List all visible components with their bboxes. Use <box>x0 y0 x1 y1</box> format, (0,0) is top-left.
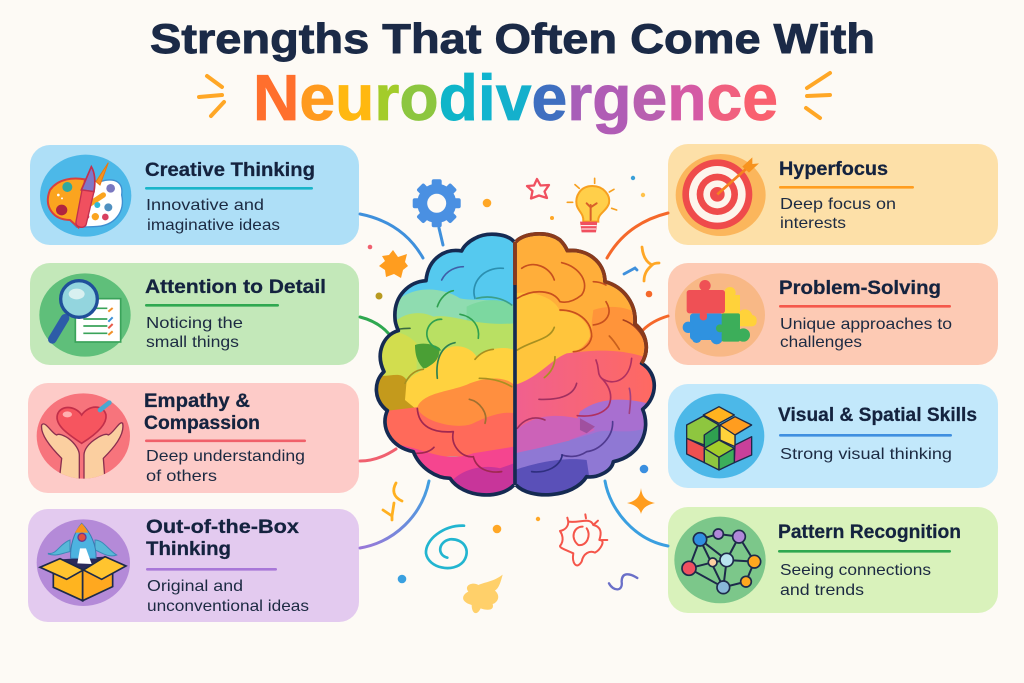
icon: hands holding heart <box>37 393 130 480</box>
underline <box>779 434 952 437</box>
description <box>146 448 305 485</box>
icon: red outline star <box>527 179 549 198</box>
heading: Problem-Solving <box>779 277 941 299</box>
panel: Hyperfocus <box>668 144 998 245</box>
description <box>780 196 896 232</box>
panel: Empathy & Compassion <box>28 383 359 493</box>
brain outline <box>376 234 654 495</box>
underline <box>779 305 951 308</box>
description <box>147 578 309 615</box>
left hemisphere colours <box>378 236 514 494</box>
description <box>780 316 952 351</box>
brain illustration <box>370 227 662 503</box>
icon: right doodle curl <box>624 247 659 281</box>
icon: magnifying glass and checklist <box>39 273 131 357</box>
icon: teal spiral <box>426 526 467 568</box>
icon: isometric cubes <box>674 394 764 478</box>
panel: Creative Thinking <box>30 145 359 245</box>
description: Unique approaches to <box>780 316 952 333</box>
description: Noticing the <box>146 315 243 332</box>
description: and trends <box>780 582 864 599</box>
underline <box>145 440 306 442</box>
panel: Pattern Recognition <box>668 507 998 613</box>
icon: gear <box>413 179 461 227</box>
underline <box>778 550 951 553</box>
description: small things <box>146 334 239 351</box>
icon: right sun rays <box>806 73 830 118</box>
description <box>146 315 243 351</box>
description: Deep understanding <box>146 448 305 465</box>
icon: red sun doodle <box>560 514 607 565</box>
panel: Out-of-the-Box Thinking <box>28 509 359 622</box>
heading: Empathy & <box>144 390 250 412</box>
description: Seeing connections <box>780 562 931 579</box>
panel: Problem-Solving <box>668 263 998 365</box>
heading: Hyperfocus <box>779 158 888 180</box>
description: Deep focus on <box>780 196 896 213</box>
description <box>780 562 931 599</box>
description <box>146 197 280 234</box>
icon: jigsaw puzzle pieces <box>675 273 765 357</box>
icon: violet squiggle <box>609 574 637 589</box>
description: Original and <box>147 578 243 595</box>
description: of others <box>146 468 217 485</box>
heading <box>146 516 299 560</box>
panel: Attention to Detail <box>30 263 359 365</box>
heading: Creative Thinking <box>145 159 315 181</box>
description: imaginative ideas <box>147 217 280 234</box>
underline <box>145 304 279 307</box>
description: unconventional ideas <box>147 598 309 615</box>
underline <box>146 568 277 571</box>
icon: yellow squiggles <box>383 483 402 520</box>
underline <box>779 186 914 189</box>
heading <box>144 390 260 434</box>
description: Innovative and <box>146 197 264 214</box>
right hemisphere colours <box>516 236 652 493</box>
rainbow heading: Neurodivergence: Neurodivergence <box>253 61 778 134</box>
connector lines <box>360 213 668 548</box>
icon: yellow splat <box>463 575 503 613</box>
icon: left sun rays <box>199 76 224 116</box>
description: Strong visual thinking <box>780 446 952 463</box>
decorative dots <box>368 176 652 583</box>
heading: Visual & Spatial Skills <box>778 404 977 426</box>
icon: orange star burst <box>379 250 408 278</box>
underline <box>145 187 313 190</box>
icon: paint palette <box>40 155 131 237</box>
title: Strengths That Often Come With <box>150 15 875 62</box>
description: challenges <box>780 334 862 351</box>
heading: Attention to Detail <box>145 276 326 298</box>
icon: rocket from open box <box>37 519 130 606</box>
icon: small orange sparkle <box>627 488 655 514</box>
icon: connected network <box>674 517 766 603</box>
heading: Out-of-the-Box <box>146 516 299 538</box>
panel: Visual & Spatial Skills <box>668 384 998 488</box>
brain folds <box>398 263 645 472</box>
description: interests <box>780 215 846 232</box>
icon: target with arrow <box>676 154 766 236</box>
heading: Pattern Recognition <box>778 521 961 543</box>
heading: Thinking <box>146 538 231 560</box>
heading: Compassion <box>144 412 260 434</box>
icon: light bulb <box>567 178 617 232</box>
